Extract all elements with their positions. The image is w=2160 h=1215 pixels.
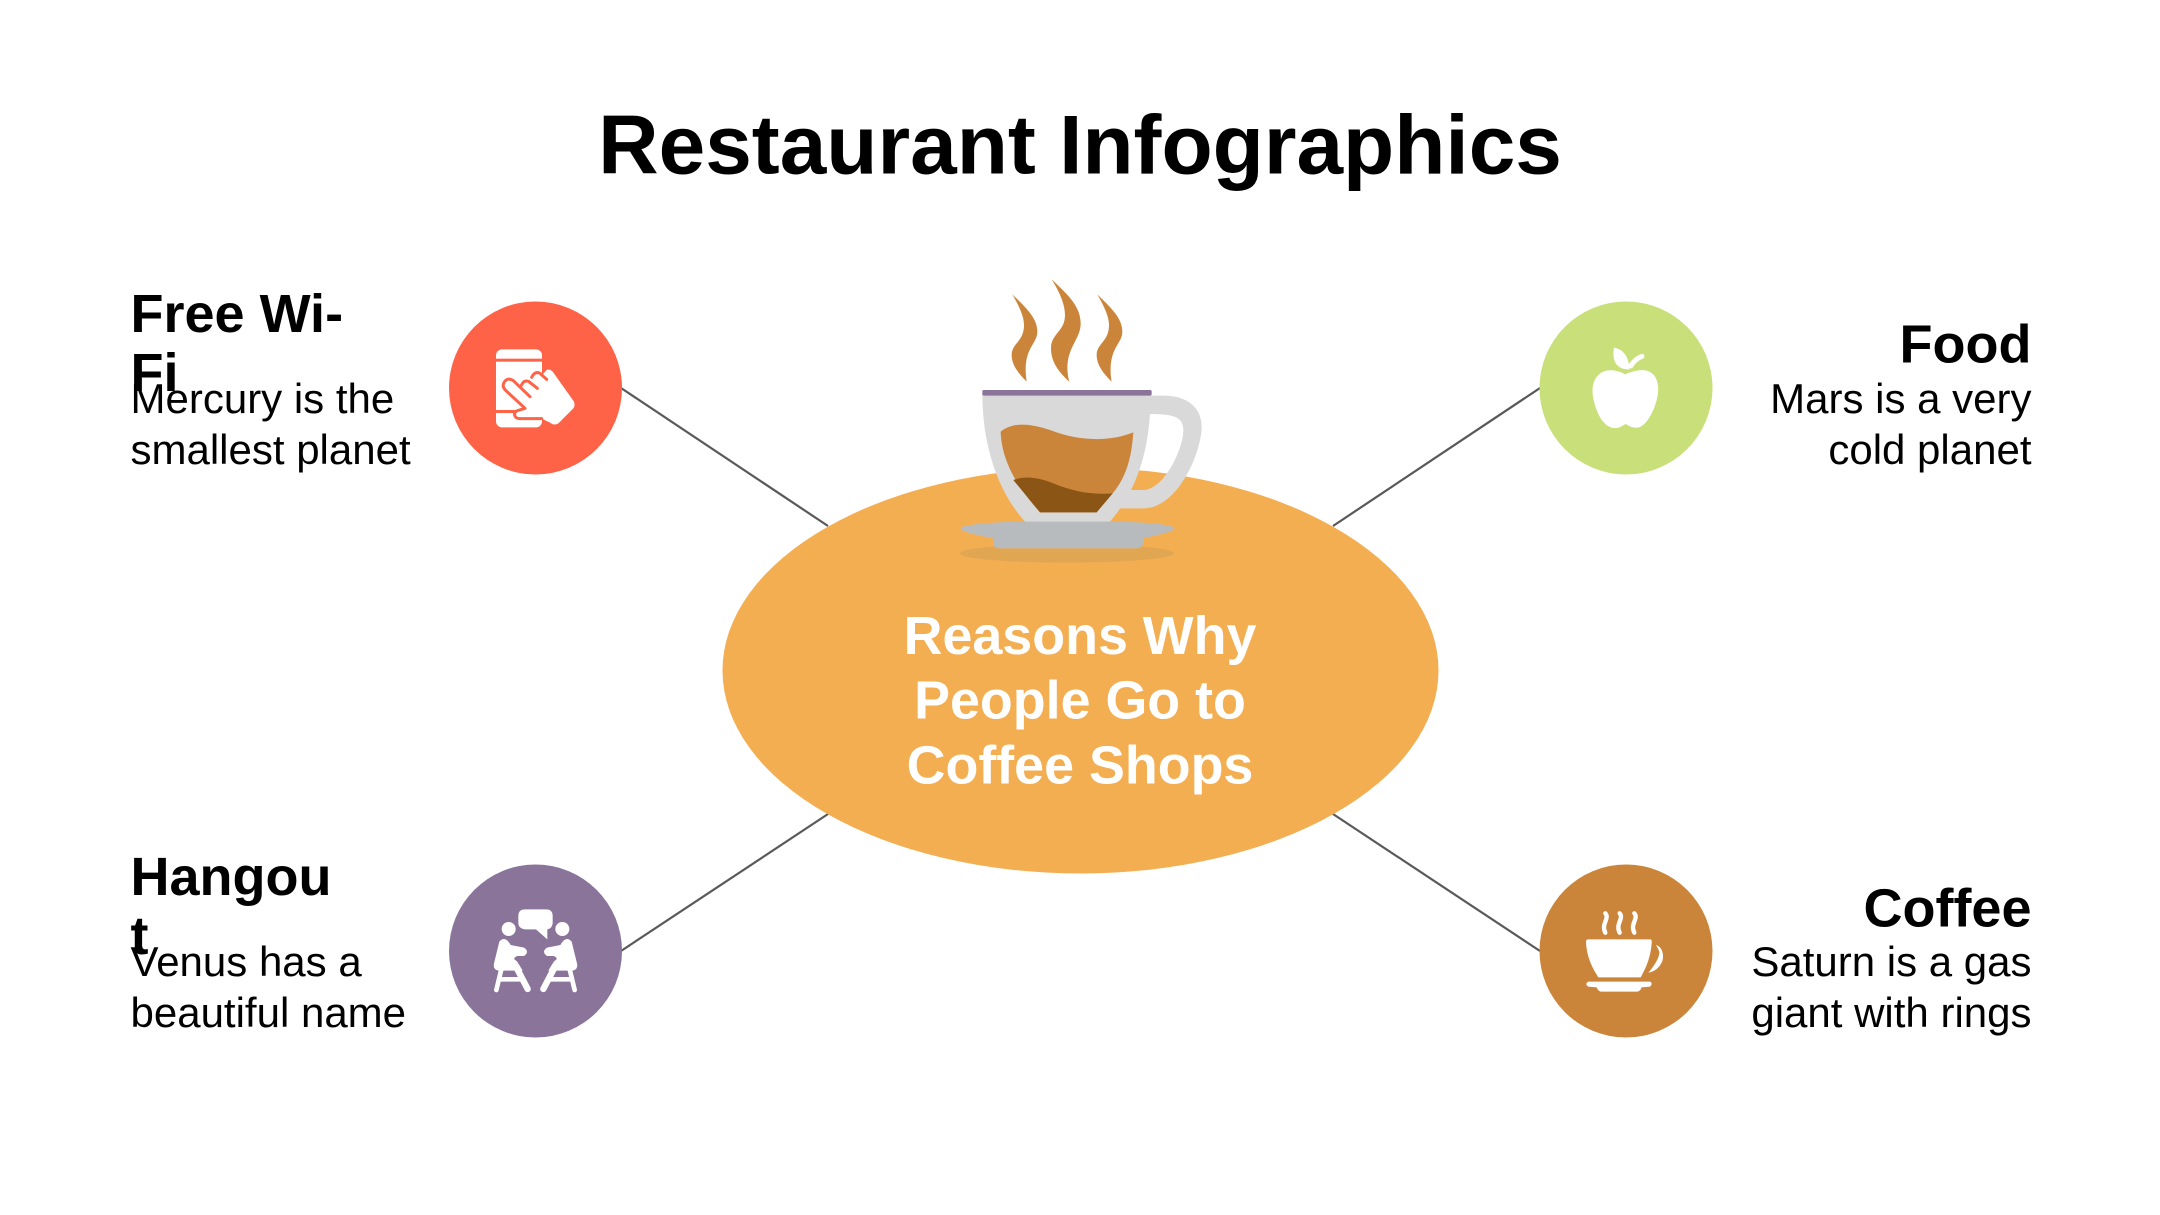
coffee dark layer: [1013, 478, 1113, 512]
central text: Coffee Shops: [907, 736, 1253, 796]
text block: Free Wi-Fi: [130, 284, 411, 473]
cup handle: [1120, 396, 1202, 508]
central text: Reasons Why: [904, 606, 1256, 666]
central text: People Go to: [914, 670, 1246, 730]
saucer: [961, 522, 1174, 548]
cup body: [982, 393, 1151, 523]
icon: two people talking: [494, 909, 577, 990]
text block: Free Wi-Fi: smallest planet: [130, 426, 411, 473]
text block: Coffee: [1751, 878, 2032, 1036]
connector: Free Wi-Fi: [621, 388, 828, 526]
icon circle: Food: [1540, 302, 1712, 474]
text block: Food: Mars is a very: [1770, 375, 2032, 422]
icon: coffee cup: [1586, 913, 1663, 992]
connector: Hangout: [621, 814, 828, 951]
icon circle: Hangout: [449, 864, 622, 1038]
title: Restaurant Infographics: [598, 98, 1562, 192]
cup rim: [982, 390, 1152, 396]
icon: coffee cup illustration: [960, 279, 1202, 563]
text block: Coffee: Saturn is a gas: [1751, 938, 2032, 985]
text block: Hangout: Venus has a: [130, 938, 362, 985]
icon: phone and hand: [496, 349, 575, 427]
icon circle: Coffee: [1540, 864, 1712, 1038]
text block: Hangout: t: [130, 906, 148, 966]
icon circle: Free Wi-Fi: [449, 302, 622, 474]
text block: Food: cold planet: [1828, 426, 2032, 473]
steam: [1012, 279, 1122, 382]
text block: Free Wi-Fi: Free Wi-: [130, 284, 343, 344]
text block: Free Wi-Fi: Mercury is the: [130, 375, 394, 422]
coffee: [1001, 425, 1133, 512]
text block: Hangout: [130, 847, 406, 1036]
connector: Coffee: [1333, 814, 1540, 951]
central ellipse: [722, 468, 1438, 874]
central text: [904, 606, 1256, 796]
connector: Food: [1333, 388, 1540, 526]
text block: Food: [1770, 314, 2032, 473]
text block: Coffee: giant with rings: [1751, 989, 2032, 1036]
saucer shadow: [960, 544, 1174, 563]
text block: Hangout: beautiful name: [130, 989, 406, 1036]
text block: Food: Food: [1900, 314, 2032, 374]
text block: Coffee: Coffee: [1863, 878, 2032, 938]
icon: apple: [1592, 348, 1658, 428]
text block: Hangout: Hangou: [130, 847, 331, 907]
text block: Free Wi-Fi: Fi: [130, 343, 178, 403]
